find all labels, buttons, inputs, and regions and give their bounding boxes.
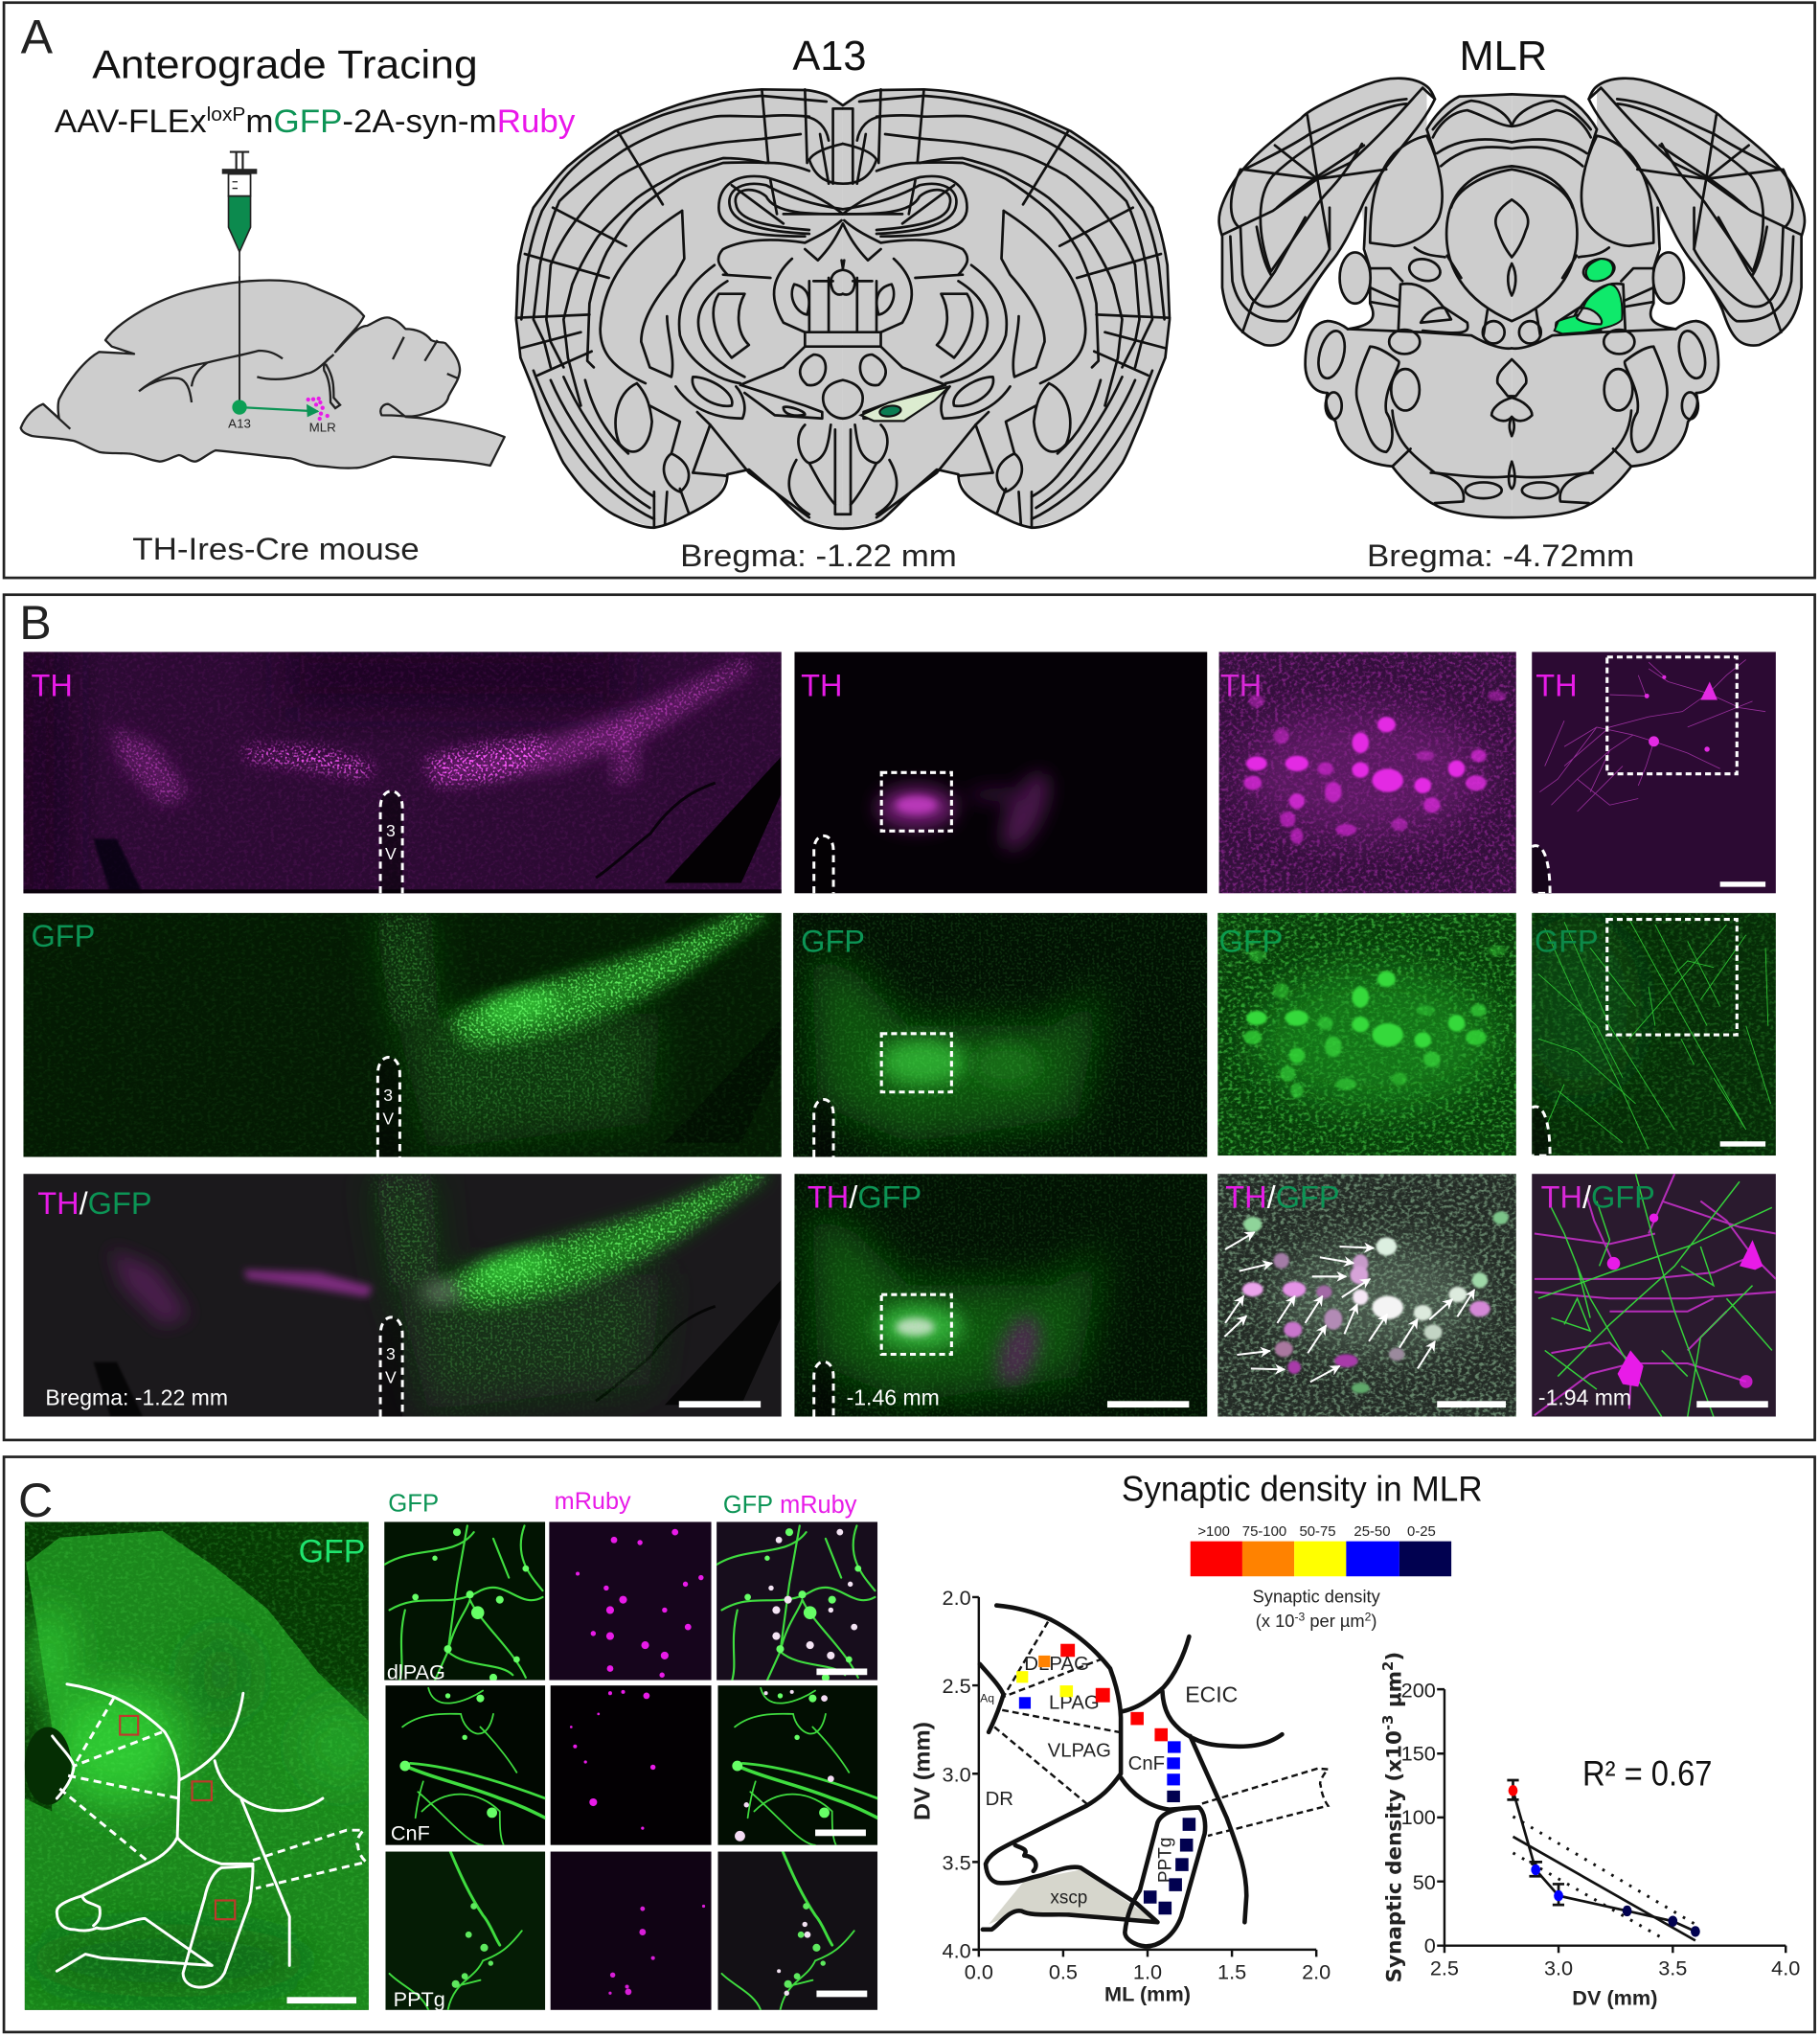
column header GFP: GFP: [388, 1490, 439, 1517]
tile: dlPAG merge: [717, 1521, 877, 1681]
sagittal mouse brain: [21, 276, 505, 469]
micrograph: GFP low magnification: [23, 912, 782, 1157]
heading MLR: MLR: [1460, 34, 1547, 80]
scale bar: [816, 1668, 867, 1675]
region labels: LPAG: [1049, 1692, 1100, 1713]
atlas map chart: 2.5: [943, 1674, 971, 1698]
tile: dlPAG mRuby: [549, 1521, 712, 1681]
region labels: xscp: [1050, 1888, 1087, 1909]
region labels: Aq: [980, 1692, 994, 1705]
panel C: MLR terminals and synaptic density: [4, 1457, 1815, 2032]
panel B: histology grid: [4, 595, 1815, 1440]
y axis title: 2: [1379, 1661, 1397, 1671]
region labels: DR: [986, 1789, 1013, 1810]
tile: CnF mRuby: [550, 1685, 712, 1845]
label TH: TH: [32, 668, 73, 702]
coronal section at MLR: [1219, 79, 1805, 517]
dashed region of interest: [881, 1294, 951, 1354]
panel A: anterograde tracing schematic: [4, 3, 1815, 578]
region labels: VLPAG: [1048, 1741, 1111, 1762]
dashed region of interest: [881, 772, 951, 831]
regression scatter chart: 50: [1413, 1870, 1436, 1894]
regression scatter chart: 200: [1401, 1678, 1436, 1702]
micrograph: TH mid magnification: [794, 652, 1207, 893]
data points: [1509, 1785, 1700, 1937]
label A13: A13: [228, 417, 251, 431]
micrograph: GFP cells: [1217, 912, 1516, 1155]
panel letter A: A: [21, 11, 54, 64]
scale bar: [1437, 1401, 1506, 1407]
dashed region of interest: [1607, 920, 1737, 1035]
caption bregma A13: Bregma: -1.22 mm: [680, 538, 957, 573]
red sampling boxes: [120, 1716, 235, 1919]
micrograph: GFP midbrain with atlas overlay: [25, 1521, 369, 2010]
atlas map chart: 2.0: [943, 1586, 971, 1610]
colour legend: 2: [1365, 1610, 1372, 1623]
scale bar: [1720, 1141, 1765, 1147]
micrograph: GFP mid magnification: [793, 912, 1207, 1157]
y axis title: Synaptic density (x10: [1382, 1728, 1406, 1982]
third ventricle outline: [377, 1057, 399, 1157]
column header mRuby: mRuby: [555, 1488, 631, 1515]
MLR terminals: [307, 397, 330, 421]
tile: dlPAG GFP: [384, 1521, 546, 1683]
label bregma: -1.94 mm: [1538, 1384, 1631, 1409]
label TH/GFP: TH/GFP: [37, 1186, 152, 1221]
atlas map chart: 0.0: [965, 1959, 993, 1983]
colour legend: 75-100: [1242, 1524, 1286, 1540]
tile: PPTg merge: [718, 1851, 877, 2010]
axis title DV: DV (mm): [909, 1722, 934, 1820]
colour legend: >100: [1197, 1524, 1230, 1540]
regression scatter chart: 150: [1401, 1742, 1436, 1766]
density squares: [1016, 1644, 1195, 1914]
micrograph: merged cells with arrows: [1217, 1174, 1516, 1416]
R squared annotation: R² = 0.67: [1582, 1753, 1713, 1793]
micrograph: GFP distal: [1532, 912, 1776, 1155]
scale bar: [1720, 881, 1765, 887]
micrograph: merged low magnification: [23, 1174, 782, 1416]
atlas outlines: [53, 1684, 323, 1987]
region labels: ECIC: [1185, 1682, 1238, 1707]
third ventricle outline: V: [382, 1110, 394, 1129]
A13 injection dot and arrow: [232, 400, 319, 417]
scale bar: [287, 1997, 356, 2003]
scale bar: [1696, 1401, 1768, 1407]
coronal section at A13: [516, 89, 1170, 529]
label bregma: Bregma: -1.22 mm: [45, 1384, 228, 1409]
scale bar: [816, 1991, 867, 1997]
regression scatter chart: [1379, 1652, 1800, 2009]
caption bregma MLR: Bregma: -4.72mm: [1367, 538, 1634, 573]
label TH: TH: [1536, 668, 1578, 702]
micrograph: merged mid magnification: [794, 1174, 1207, 1416]
colour legend: ): [1371, 1611, 1377, 1631]
third ventricle outline: 3: [386, 1344, 396, 1363]
atlas map chart: [909, 1586, 1331, 2005]
third ventricle outline: V: [385, 1367, 397, 1386]
tile: CnF GFP: [385, 1685, 546, 1845]
regression scatter chart: 4.0: [1771, 1956, 1800, 1979]
micrograph: TH cells: [1218, 652, 1516, 893]
y axis title: -3: [1379, 1715, 1397, 1730]
virus construct label: loxP: [207, 104, 245, 126]
atlas map chart: 0.5: [1049, 1959, 1078, 1983]
dashed region of interest: [1607, 657, 1737, 774]
scale bar: [815, 1830, 866, 1836]
label PPTg: PPTg: [394, 1987, 445, 2011]
label GFP: GFP: [1219, 924, 1283, 958]
micrograph: TH low magnification: [23, 652, 782, 893]
region labels: CnF: [1128, 1753, 1165, 1774]
label TH: TH: [1220, 668, 1262, 702]
plot axes: [1437, 1689, 1786, 1953]
tile: PPTg GFP: [385, 1851, 546, 2011]
scale bar: [679, 1401, 761, 1407]
third ventricle outline: 3: [386, 821, 396, 840]
y axis title: ): [1382, 1652, 1406, 1661]
map axes: [972, 1597, 1316, 1956]
atlas map chart: 1.0: [1133, 1959, 1162, 1983]
micrograph: TH distal: [1532, 652, 1776, 893]
label bregma: -1.46 mm: [847, 1384, 940, 1409]
scale bar: [1107, 1401, 1189, 1407]
label dlPAG: dlPAG: [387, 1659, 445, 1683]
tile: CnF merge: [718, 1685, 877, 1845]
third ventricle outline: 3: [383, 1086, 393, 1105]
regression scatter chart: 100: [1401, 1805, 1436, 1829]
virus construct label: m: [245, 103, 274, 140]
label MLR: MLR: [309, 421, 336, 435]
virus construct label: GFP-2A-syn-mRuby: [274, 103, 573, 140]
third ventricle outline: V: [385, 844, 397, 863]
regression lines: [1507, 1780, 1695, 1940]
colour legend: 25-50: [1354, 1524, 1391, 1540]
heading A13: A13: [792, 34, 867, 80]
atlas map chart: 3.0: [943, 1762, 971, 1786]
x axis title: DV (mm): [1572, 1985, 1657, 2009]
atlas map chart: 2.0: [1302, 1959, 1331, 1983]
panel letter C: C: [18, 1474, 53, 1527]
colour legend: 50-75: [1299, 1524, 1336, 1540]
label GFP: GFP: [32, 919, 95, 953]
xscp region: [989, 1870, 1157, 1924]
icon: syringe: [222, 152, 257, 281]
colour legend: -3: [1294, 1610, 1306, 1623]
colour legend: 0-25: [1407, 1524, 1436, 1540]
colour legend: [1191, 1524, 1451, 1631]
brain region outlines: [980, 1606, 1282, 1946]
caption: mouse line: TH-Ires-Cre mouse: [132, 532, 420, 566]
atlas map chart: 3.5: [943, 1851, 971, 1875]
column header GFP mRuby: GFP mRuby: [723, 1492, 857, 1519]
regression scatter chart: 3.0: [1544, 1956, 1573, 1979]
region labels: PPTg: [1155, 1838, 1175, 1883]
regression scatter chart: 0: [1424, 1933, 1436, 1957]
label GFP: GFP: [299, 1533, 365, 1569]
regression scatter chart: 2.5: [1430, 1956, 1459, 1979]
tile: PPTg mRuby: [550, 1851, 712, 2010]
region labels: DLPAG: [1024, 1654, 1089, 1675]
arrows marking co-labelled cells: [1224, 1232, 1474, 1382]
micrograph: merged distal: [1532, 1174, 1776, 1416]
colour legend: per µm: [1305, 1611, 1365, 1631]
dashed region of interest: [881, 1034, 951, 1092]
label GFP: GFP: [1535, 924, 1599, 958]
region labels: [980, 1654, 1238, 1909]
label CnF: CnF: [391, 1820, 430, 1844]
virus construct label: AAV-FLEx: [55, 103, 202, 140]
label TH/GFP: TH/GFP: [1225, 1179, 1340, 1214]
heading: synaptic density: Synaptic density in MLR: [1122, 1470, 1483, 1509]
third ventricle outline: [380, 1317, 402, 1417]
label TH/GFP: TH/GFP: [1541, 1179, 1655, 1214]
heading: anterograde tracing: Anterograde Tracing: [92, 41, 478, 86]
y axis title: µm: [1382, 1671, 1406, 1715]
axis title ML: ML (mm): [1104, 1981, 1191, 2005]
third ventricle outline: [380, 791, 402, 893]
label TH: TH: [801, 668, 843, 702]
atlas map chart: 1.5: [1217, 1959, 1246, 1983]
atlas map chart: 4.0: [943, 1939, 971, 1963]
panel letter B: B: [19, 596, 52, 650]
colour legend: (x 10: [1256, 1611, 1294, 1631]
colour legend: Synaptic density: [1253, 1586, 1381, 1606]
regression scatter chart: 3.5: [1658, 1956, 1687, 1979]
label TH/GFP: TH/GFP: [808, 1179, 921, 1214]
label GFP: GFP: [801, 924, 865, 958]
